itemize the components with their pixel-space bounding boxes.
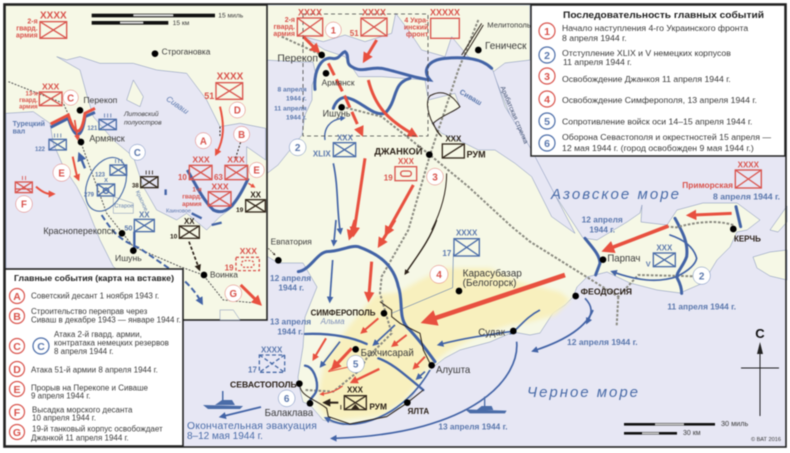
unit: Romanian corps: XXX [445, 135, 462, 144]
legend C: Атака 2-й гвард. армии, [54, 330, 142, 339]
marker 6 [278, 390, 295, 407]
date labels south: 13 апреля [270, 317, 311, 327]
place labels: Ишунь [323, 109, 351, 119]
legend C: контратака немецких резервов [54, 338, 169, 348]
date labels west: 11 апреля [274, 106, 307, 113]
unit: 2nd Guards Army: 2-я [285, 17, 295, 24]
marker 1: 1 [331, 25, 336, 35]
sequence item 6 [539, 132, 771, 153]
inset place labels: Строгановка [162, 46, 211, 56]
sequence item 3 [539, 68, 731, 84]
scale bar main: 30 км [683, 430, 701, 437]
Azov Sea label: Азовское море [550, 186, 679, 203]
labels east: КЕРЧЬ [734, 234, 761, 243]
unit: 2nd Guards Army inset [16, 11, 67, 40]
unit: 38 dark [132, 171, 158, 189]
unit: 19th tank corps [384, 157, 417, 183]
inset place labels: Турецкий [13, 120, 45, 128]
panel: event sequence [531, 5, 785, 156]
inset markers: E [253, 166, 260, 177]
unit: V corps [646, 243, 675, 269]
date label 12 April: 12 апреля 1944 г. [567, 337, 638, 347]
units: blue regiments: 123 [95, 173, 106, 179]
marker 3 [427, 168, 443, 185]
legend B: Строительство переправ через [31, 307, 148, 316]
units: blue regiments: I I I [54, 133, 62, 139]
inset place labels [13, 46, 238, 279]
unit: 19 dark: 19 [236, 207, 244, 214]
legend A: Советский десант 1 ноября 1943 г. [31, 292, 159, 300]
unit: 19 tank dashed: 19 [225, 264, 234, 273]
date labels west: 1944 г. [286, 115, 307, 122]
units: red corps at Sivash: XXX [192, 155, 210, 165]
panel: inset map [5, 5, 267, 320]
labels east: 11 апреля 1944 г. [667, 302, 736, 312]
unit: 51st Army [350, 7, 387, 38]
central and southern Crimea [230, 220, 565, 438]
thin line for 17th army label [392, 253, 453, 313]
inset red arrows [36, 107, 257, 301]
unit: 2nd Guards Army [273, 7, 323, 38]
marker 2: 2 [295, 143, 301, 154]
inset scale bars: 15 км [173, 20, 190, 27]
place labels south: Судак [478, 327, 506, 338]
inset place labels: Сиваш [165, 94, 191, 116]
unit: 17th Army HQ Sevastopol dashed: XXXX [261, 345, 283, 354]
sequence item 3: 3 [544, 71, 550, 83]
sequence item 3: Освобождение Джанкоя 11 апреля 1944 г. [562, 74, 731, 84]
unit: XLIX corps: XXX [337, 134, 354, 143]
unit: F regiment [15, 176, 32, 193]
Sivash front [187, 170, 248, 212]
panel: inset events legend [5, 269, 183, 446]
ship icon south [465, 397, 507, 413]
unit: 17th Army HQ Sevastopol dashed: 17 [248, 365, 257, 374]
unit: 50 blue [124, 210, 154, 233]
inset markers: G [230, 289, 237, 300]
units: red corps at Sivash: XXX [227, 155, 245, 165]
front lines and arrows north [303, 23, 492, 230]
place labels south [230, 236, 522, 419]
unit: 13th Guards: армия [19, 104, 38, 110]
legend C: C [13, 341, 21, 353]
unit: 38 dark: 38 [132, 183, 139, 189]
ship and evacuation arrow west [203, 391, 243, 409]
units: red corps at Sivash: 10 [178, 173, 187, 182]
water labels [458, 85, 530, 145]
legend G: G [13, 427, 21, 439]
sequence item 4: 4 [544, 94, 550, 106]
legend F: 10 апреля 1944 г. [32, 414, 96, 422]
legend E: E [13, 384, 21, 396]
date labels south: Альма [320, 317, 345, 326]
sequence item 6: 6 [544, 138, 550, 150]
inset dark arrows [189, 127, 245, 267]
labels east: 12 апреля [582, 215, 623, 225]
unit: 2nd Guards Army: XXXX [298, 7, 322, 17]
legend D [10, 362, 158, 376]
legend E: 9 апреля 1944 г. [31, 392, 90, 400]
place labels south: Алушта [436, 365, 471, 376]
inset markers: C [67, 93, 74, 104]
sequence item 1 [539, 23, 748, 43]
inset scale bars [92, 12, 244, 27]
unit: 4th Ukrainian Front: инский [404, 23, 428, 31]
unit: V corps: XXX [656, 243, 673, 252]
inset markers [16, 90, 264, 302]
place labels south: ЯЛТА [408, 407, 429, 416]
sequence item 2: Отступление XLIX и V немецких корпусов [562, 48, 731, 58]
unit: 50 blue: 50 [124, 224, 132, 233]
inset scale bars: 15 миль [218, 12, 244, 19]
unit: 4th Ukrainian Front: фронт [406, 32, 429, 39]
sequence item 6: Оборона Севастополя и окрестностей 15 апреля — [562, 132, 771, 142]
date labels south: 12 апреля [270, 273, 311, 283]
unit: 51st Army: XXXX [362, 7, 386, 17]
unit: 17th Army HQ Sevastopol dashed [248, 345, 285, 374]
legend B: Сиваш в декабре 1943 — январе 1944 г. [31, 316, 181, 324]
inset markers: F [21, 200, 27, 211]
unit: 13th Guards: 13-я [26, 91, 38, 97]
sequence heading: Последовательность главных событий [563, 10, 764, 20]
inset place labels: полуостров [124, 120, 162, 127]
legend B [10, 307, 181, 324]
inset road blue dashed [102, 215, 200, 300]
unit: Romanian corps: РУМ [467, 149, 486, 159]
compass: С [755, 326, 765, 341]
legend C: C [37, 341, 45, 353]
unit: 13th Guards [19, 81, 62, 110]
inset place labels: Ишунь [115, 253, 142, 263]
place labels south: (Белогорск) [463, 278, 516, 289]
marker 2 [289, 139, 306, 156]
labels east [581, 191, 780, 312]
date labels west [274, 86, 307, 122]
labels east: 8 апреля 1944 г. [713, 191, 780, 201]
date labels west: 8 апреля [278, 86, 307, 93]
scale bar main [624, 419, 748, 437]
unit: 2nd Guards Army inset: 2-я [27, 18, 38, 25]
place labels south: СЕВАСТОПОЛЬ [230, 379, 297, 389]
marker 4: 4 [436, 270, 442, 281]
main map land [265, 5, 760, 425]
unit: 51st Army inset: 51 [204, 91, 214, 101]
legend E: Прорыв на Перекопе и Сиваше [31, 384, 149, 392]
legend F: F [14, 407, 21, 419]
unit: 17th Army: XXXX [456, 229, 478, 238]
place labels: Армянск [322, 77, 355, 87]
inset place labels: Литовский [123, 110, 159, 118]
unit: 2nd Guards Army: гвард. [274, 24, 295, 31]
sequence item 4 [539, 91, 757, 107]
sequence item 6: 12 мая 1944 г. (город освобожден 9 мая 1944 г.) [562, 143, 754, 153]
units: blue regiments [35, 113, 127, 199]
legend heading: Главные события (карта на вставке) [14, 273, 174, 283]
unit: 50 blue: XX [139, 210, 150, 219]
date labels west: 1944 г. [286, 95, 307, 102]
marker 6: 6 [284, 394, 290, 405]
unit: 51st Army: 51 [350, 29, 359, 38]
labels north main map [273, 7, 531, 185]
place labels south: СИМФЕРОПОЛЬ [311, 308, 376, 317]
units: red corps at Sivash: армия [182, 201, 202, 208]
Perekop front [51, 112, 95, 134]
units: blue regiments: 279 [84, 193, 95, 199]
legend G [10, 424, 163, 442]
date labels south: 1944 г. [277, 327, 303, 337]
units: red corps at Sivash: 1-я [192, 187, 202, 194]
place labels: Перекоп [277, 54, 318, 65]
legend C: 8 апреля 1944 г. [54, 347, 114, 356]
unit: Romanian corps [442, 135, 486, 159]
unit: 17th Army: 17 [442, 249, 452, 258]
Black Sea label: Черное море [527, 384, 638, 401]
units: red corps at Sivash: гвард. [182, 194, 202, 201]
place labels south: Евпатория [271, 236, 312, 246]
marker 1 [325, 22, 341, 38]
copyright: © ВАТ 2016 [751, 436, 781, 443]
sequence item 1: Начало наступления 4-го Украинского фронта [562, 23, 748, 33]
sequence item 4: Освобождение Симферополя, 13 апреля 1944 г. [562, 95, 757, 105]
unit: 38 dark: I I I [145, 171, 154, 177]
units: blue regiments: 121 [87, 126, 98, 132]
inset blue arrow [81, 158, 85, 168]
inset markers: E [58, 168, 65, 179]
sequence item 5 [539, 113, 752, 129]
labels east: Парпач [607, 253, 640, 264]
inset place labels: Красноперекопск [43, 226, 115, 236]
unit: 4th Ukrainian Front: XXXXX [430, 7, 460, 17]
labels east: ФЕОДОСИЯ [581, 286, 632, 296]
unit: 13th Guards: XXX [42, 81, 60, 91]
inset place labels: Воинка [210, 269, 238, 279]
date labels south: 1944 г. [278, 283, 304, 293]
marker 5 [347, 355, 364, 373]
Sivash water, main map [303, 13, 575, 233]
unit: 2nd Guards Army inset: XXXX [40, 11, 67, 22]
marker 2 east: 2 [699, 271, 705, 282]
unit: Coastal Army: XXXX [738, 160, 760, 169]
Taman peninsula land [753, 206, 787, 280]
legend B: B [13, 311, 21, 323]
blue ellipse reserves [77, 151, 135, 218]
inset lake detail [113, 80, 240, 320]
labels east: 1944 г. [589, 225, 615, 235]
units: blue regiments: I I I [115, 159, 123, 165]
Karkinit bay water [265, 60, 316, 175]
unit: 10 dark: XX [184, 217, 195, 226]
blue dashes [134, 189, 222, 250]
place labels: Геническ [485, 41, 527, 52]
units: red corps at Sivash: 63 [214, 173, 223, 182]
evacuation label: 8–12 мая 1944 г. [187, 431, 263, 442]
sequence item 1: 8 апреля 1944 г. [562, 33, 627, 43]
inset markers: D [234, 106, 241, 117]
place labels: Мелитополь [487, 21, 531, 30]
unit: 19th tank corps: 19 [384, 174, 393, 183]
evacuation label [187, 421, 317, 442]
evacuation label: Окончательная эвакуация [187, 421, 317, 432]
units: red corps at Sivash [178, 155, 248, 208]
place labels south: Карасубазар [463, 267, 522, 279]
sequence item 5: 5 [544, 116, 550, 128]
city dots [318, 47, 482, 158]
marker 5: 5 [353, 360, 359, 371]
inset dots [77, 50, 207, 278]
unit: 19 tank dashed [225, 246, 259, 273]
unit: 19 tank dashed: XXX [240, 246, 257, 256]
dashed inset area box [303, 14, 428, 136]
unit: 19 dark: XX [250, 191, 262, 200]
unit: Coastal Army: Приморская [682, 180, 733, 190]
units: red corps at Sivash: XXX [211, 181, 229, 191]
legend F [10, 404, 133, 422]
units: blue regiments: I I I [104, 113, 112, 119]
unit: Coastal Army [682, 160, 761, 190]
legend A: A [13, 291, 21, 303]
unit: 13th Guards: гвард. [19, 98, 38, 104]
sequence item 2: 2 [544, 50, 550, 62]
inset place labels: Каиновое [166, 209, 191, 215]
mountain area [318, 268, 570, 420]
sequence item 5: Сопротивление войск оси 14–15 апреля 1944 г. [562, 116, 752, 126]
unit: 10 dark: 10 [170, 233, 178, 240]
unit: 19th tank corps: XXX [398, 157, 415, 166]
units: blue regiments: X [104, 178, 108, 184]
unit: 19 dark [236, 191, 265, 214]
unit: 4th Ukrainian Front: 4 Укра- [404, 17, 429, 24]
place labels south: Балаклава [265, 408, 314, 419]
inset place labels: вал [13, 128, 25, 135]
legend D: D [13, 364, 21, 376]
marker 2 east [693, 267, 710, 284]
inset place labels: Старое [114, 203, 134, 209]
inset place labels: Перекоп [83, 95, 118, 105]
inset water [6, 57, 266, 317]
place labels [277, 21, 531, 157]
sequence item 2 [539, 47, 731, 67]
legend G: Джанкой 11 апреля 1944 г. [31, 434, 129, 442]
marker 4 [430, 265, 448, 283]
scale bar main: 30 миль [721, 419, 748, 428]
sequence item 2: 11 апреля 1944 г. [563, 57, 632, 67]
unit: F regiment: I I [22, 176, 27, 182]
date labels south: 13 апреля 1944 г. [438, 422, 508, 432]
unit: 2nd Guards Army inset: гвард. [16, 26, 38, 33]
inset place labels: Армянск [89, 134, 125, 144]
inset railway [8, 82, 252, 303]
unit: 2nd Guards Army inset: армия [16, 33, 38, 40]
legend D: Атака 51-й армии 8 апреля 1944 г. [31, 366, 158, 374]
unit: 10 dark [170, 217, 199, 240]
place labels south: Бахчисарай [361, 348, 414, 359]
unit: Romanian corps south: XXX [347, 386, 364, 395]
inset markers: A [200, 136, 207, 147]
marker 3: 3 [432, 172, 438, 183]
water labels: Арабатская стрелка [498, 85, 530, 145]
unit: V corps: V [646, 260, 651, 269]
unit: 51st Army inset: XXXX [217, 71, 244, 82]
inset markers: C [134, 148, 141, 159]
legend A [10, 288, 159, 304]
water labels: Сиваш [458, 87, 484, 107]
unit: 17th Army [442, 229, 479, 258]
east Crimea [572, 160, 780, 320]
unit: 4th Ukrainian Front [404, 7, 460, 39]
legend G: 19-й танковый корпус освобождает [32, 424, 163, 434]
evacuation arrow [224, 407, 261, 416]
legend C [10, 330, 169, 356]
legend F: Высадка морского десанта [32, 406, 133, 414]
inset markers: B [238, 130, 245, 141]
unit: 2nd Guards Army: армия [273, 31, 295, 38]
place labels: ДЖАНКОЙ [374, 146, 423, 157]
arrow along Feodosia coast [536, 310, 593, 350]
compass [741, 326, 779, 416]
railways main map [282, 20, 708, 392]
unit: XLIX corps: XLIX [313, 150, 331, 159]
unit: 51st Army inset [204, 71, 244, 101]
unit: Romanian corps south: I [340, 406, 342, 412]
units: blue regiments: 122 [35, 147, 46, 153]
unit: Romanian corps south: РУМ [369, 401, 387, 411]
unit: XLIX corps [313, 134, 356, 159]
inset place labels: Красное [134, 190, 149, 212]
city dots south [275, 257, 517, 407]
unit: Romanian corps south [340, 386, 387, 412]
legend E [10, 382, 149, 400]
date labels south [270, 273, 508, 432]
sequence item 1: 1 [544, 26, 550, 38]
